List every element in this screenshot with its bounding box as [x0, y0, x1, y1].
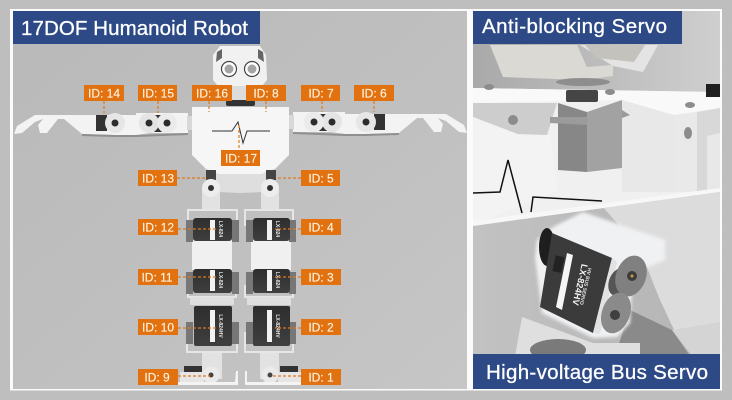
- black block: [706, 84, 720, 97]
- servo: ID 12: [193, 218, 232, 241]
- side connectors: [186, 220, 296, 344]
- label: ID 6: ID: 6: [361, 86, 387, 100]
- upper shell: [490, 45, 658, 86]
- label: ID 11: [138, 269, 178, 285]
- label: ID 5: [301, 170, 340, 186]
- servo holder with glow: [535, 212, 665, 338]
- label: ID 1: ID: 1: [308, 370, 334, 384]
- label: ID 1: [301, 369, 341, 385]
- ECG line on chest: [473, 160, 522, 213]
- heading: high-voltage bus servo: [473, 354, 720, 389]
- white body: [473, 88, 720, 225]
- panel: high-voltage bus servo: [473, 192, 720, 354]
- heading: anti-blocking servo: [473, 11, 682, 44]
- heading: anti-blocking servo: Anti-blocking Servo: [482, 15, 667, 38]
- upper servo horn: [608, 256, 647, 296]
- label: ID 10: ID: 10: [142, 320, 174, 334]
- servo: ID 3: [253, 269, 290, 293]
- white leg blocks: [190, 240, 291, 305]
- label: ID 17: ID: 17: [225, 152, 257, 166]
- label: ID 3: [301, 269, 341, 285]
- servo: ID 10: [194, 306, 232, 346]
- heading: high-voltage bus servo: High-voltage Bus Servo: [486, 361, 708, 384]
- label: ID 7: ID: 7: [308, 86, 334, 100]
- LX-824HV servo: [539, 228, 617, 334]
- servo: ID 2: LX-824HV: [274, 314, 280, 338]
- leg brackets: [187, 210, 293, 352]
- label: ID 2: ID: 2: [308, 320, 334, 334]
- label: ID 15: ID: 15: [142, 86, 174, 100]
- bracket body: [515, 190, 720, 361]
- servo: ID 3: LX-824: [274, 272, 280, 288]
- lower servo horn: [601, 292, 631, 334]
- servo: ID 11: LX-824: [217, 272, 223, 288]
- panel: anti-blocking servo: [473, 11, 720, 225]
- white diagonal divider: [473, 188, 720, 226]
- label: ID 4: [301, 219, 341, 235]
- robot torso: [192, 107, 289, 193]
- right arm: [288, 112, 467, 136]
- robot legs: [178, 170, 303, 385]
- label: ID 16: ID: 16: [196, 86, 228, 100]
- label: ID 8: [246, 85, 286, 101]
- servo: ID 10: LX-824HV: [217, 314, 223, 338]
- ID labels: [84, 85, 394, 385]
- label: ID 3: ID: 3: [308, 270, 334, 284]
- label: ID 2: [301, 319, 341, 335]
- left foot: [178, 353, 238, 385]
- label: ID 13: ID: 13: [142, 172, 174, 186]
- servo: ID 4: [253, 218, 290, 241]
- robot arms: [14, 112, 467, 137]
- servo series text: HV BUS SERVO: [578, 267, 592, 305]
- screws: [484, 84, 695, 139]
- upper leg servo mounts: [202, 170, 279, 210]
- servo: ID 4: LX-824: [274, 221, 280, 237]
- label: ID 8: ID: 8: [253, 86, 279, 100]
- dashed leader lines: [104, 101, 374, 376]
- label: ID 9: [138, 369, 178, 385]
- label: ID 12: ID: 12: [142, 220, 174, 234]
- robot head: [213, 46, 267, 106]
- heading: 17DOF Humanoid Robot: 17DOF Humanoid Robot: [21, 17, 248, 40]
- servo: ID 11: [193, 269, 232, 293]
- label: ID 4: ID: 4: [308, 220, 334, 234]
- label: ID 14: ID: 14: [88, 86, 120, 100]
- label: ID 7: [301, 85, 340, 101]
- servo model text: LX-824HV: [570, 263, 590, 306]
- label: ID 5: ID: 5: [308, 172, 334, 186]
- heading: 17DOF Humanoid Robot: [13, 11, 260, 44]
- servo: ID 12: LX-824: [217, 221, 223, 237]
- label: ID 11: ID: 11: [141, 270, 173, 284]
- panel: 17DOF humanoid robot: [13, 11, 467, 389]
- label: ID 6: [354, 85, 394, 101]
- label: ID 9: ID: 9: [144, 370, 170, 384]
- right foot: [245, 353, 303, 385]
- translucent servo: [550, 90, 630, 172]
- left arm: [14, 113, 193, 137]
- servo: ID 2: [253, 306, 290, 346]
